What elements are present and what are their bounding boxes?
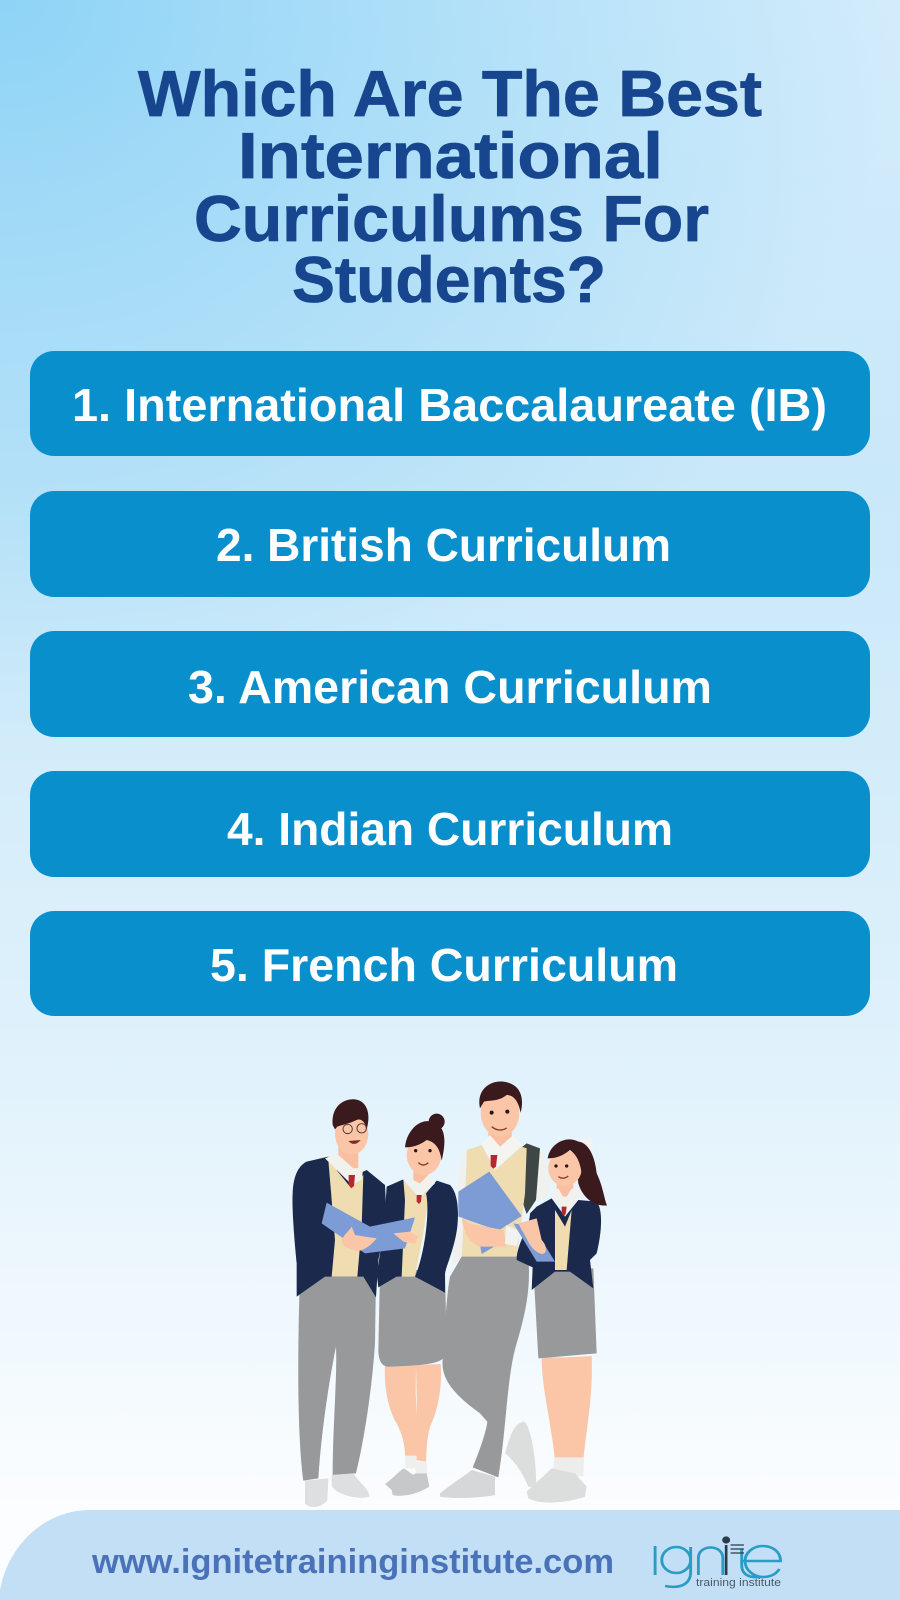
title: Students? — [292, 243, 606, 316]
title — [138, 57, 762, 316]
title: Curriculums For — [194, 182, 709, 255]
footer band — [0, 1510, 900, 1600]
website url: www.ignitetraininginstitute.com — [91, 1543, 614, 1581]
panel: curriculum 2: 2. British Curriculum — [216, 519, 671, 571]
student: girl with hair bun — [377, 1114, 458, 1496]
title: International — [238, 119, 663, 192]
panel: curriculum 5 — [30, 911, 870, 1016]
illustration: four students in uniform holding books — [292, 1081, 607, 1507]
panel: curriculum 2 — [30, 491, 870, 597]
student: tall boy with backpack — [440, 1081, 549, 1498]
title: Which Are The Best — [138, 57, 762, 130]
panel: curriculum 3: 3. American Curriculum — [188, 661, 712, 713]
panel: curriculum 4 — [30, 771, 870, 877]
panel: curriculum 1 — [30, 351, 870, 456]
panel: curriculum 5: 5. French Curriculum — [210, 939, 678, 991]
logo: ignite training institute: training institute — [696, 1577, 781, 1589]
open book held by the left pair — [322, 1203, 418, 1253]
panel: curriculum 3 — [30, 631, 870, 737]
panel: curriculum 4: 4. Indian Curriculum — [227, 803, 673, 855]
student: boy with glasses — [292, 1099, 387, 1507]
logo: ignite training institute — [655, 1536, 781, 1589]
panel: curriculum 1: 1. International Baccalaureate (IB) — [72, 379, 827, 431]
student: girl with ponytail — [513, 1137, 607, 1503]
